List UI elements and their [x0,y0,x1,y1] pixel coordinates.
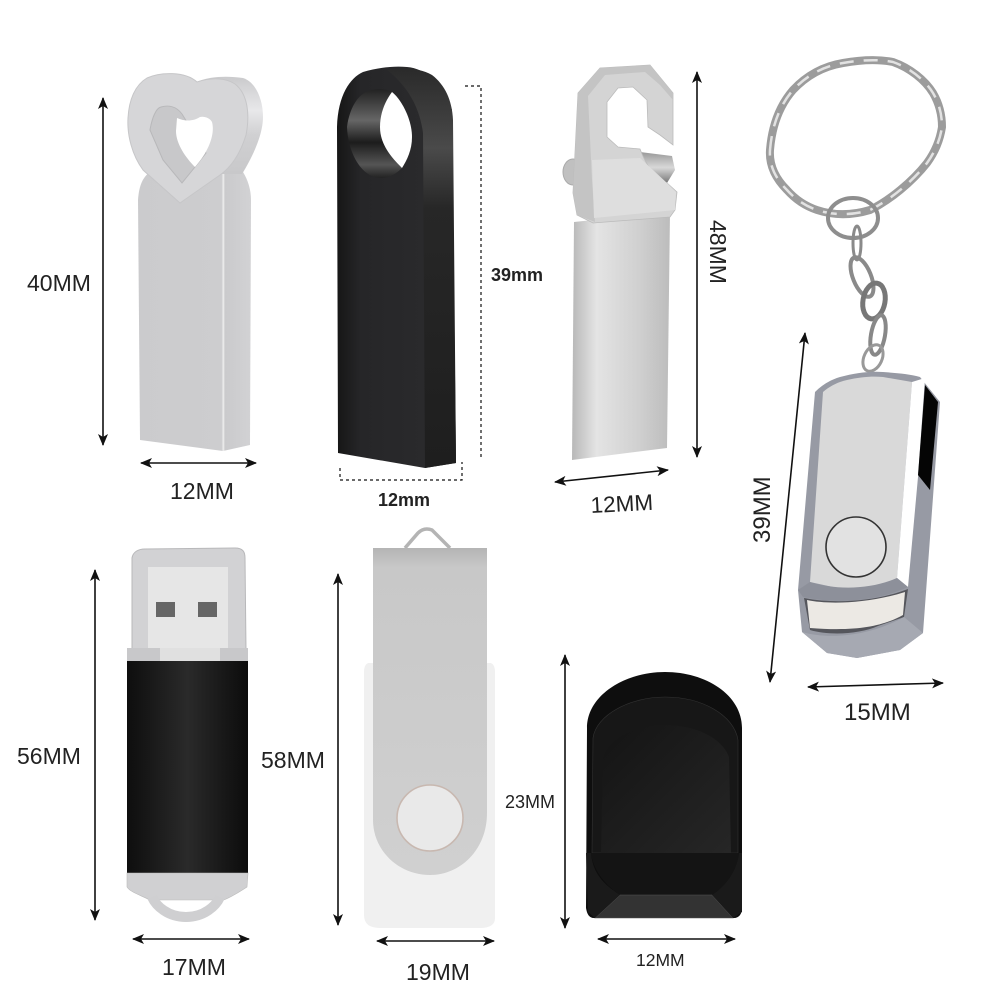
dimension: mini width [598,939,735,970]
label: 39mm: 39mm [491,265,543,285]
drive: keychain swivel USB [770,60,942,658]
dimension: mini height: 23MM [505,792,555,812]
dimension: heart width [141,463,256,504]
dimension: swivel width [377,941,494,985]
dimension: keychain height [749,333,805,682]
dimension: keychain width [808,683,943,726]
dimension: keychain width: 15MM [844,699,911,726]
dimension: cap width: 17MM [162,954,226,980]
drive: heart silver USB [128,74,263,451]
dimension: swivel width: 19MM [406,959,470,985]
label: 12mm: 12mm [378,490,430,510]
drive: black metal USB [337,67,456,468]
dimension: hook width: 12MM [590,490,654,518]
drive: black cap USB [127,548,248,917]
dimension: heart height: 40MM [27,270,91,296]
dimension: black height dashed [340,86,481,480]
dimension: hook width [555,470,668,518]
dimension: swivel height: 58MM [261,747,325,773]
dimension: mini width: 12MM [636,950,685,970]
dimension: heart width: 12MM [170,478,234,504]
dimension: keychain height: 39MM [749,476,776,543]
dimension: hook height: 48MM [705,220,731,284]
drive: hook silver USB [563,65,677,460]
drive: swivel silver USB [364,529,495,928]
dimension: cap width [133,939,249,980]
drive: mini black USB [586,672,742,918]
dimension: cap height: 56MM [17,743,81,769]
